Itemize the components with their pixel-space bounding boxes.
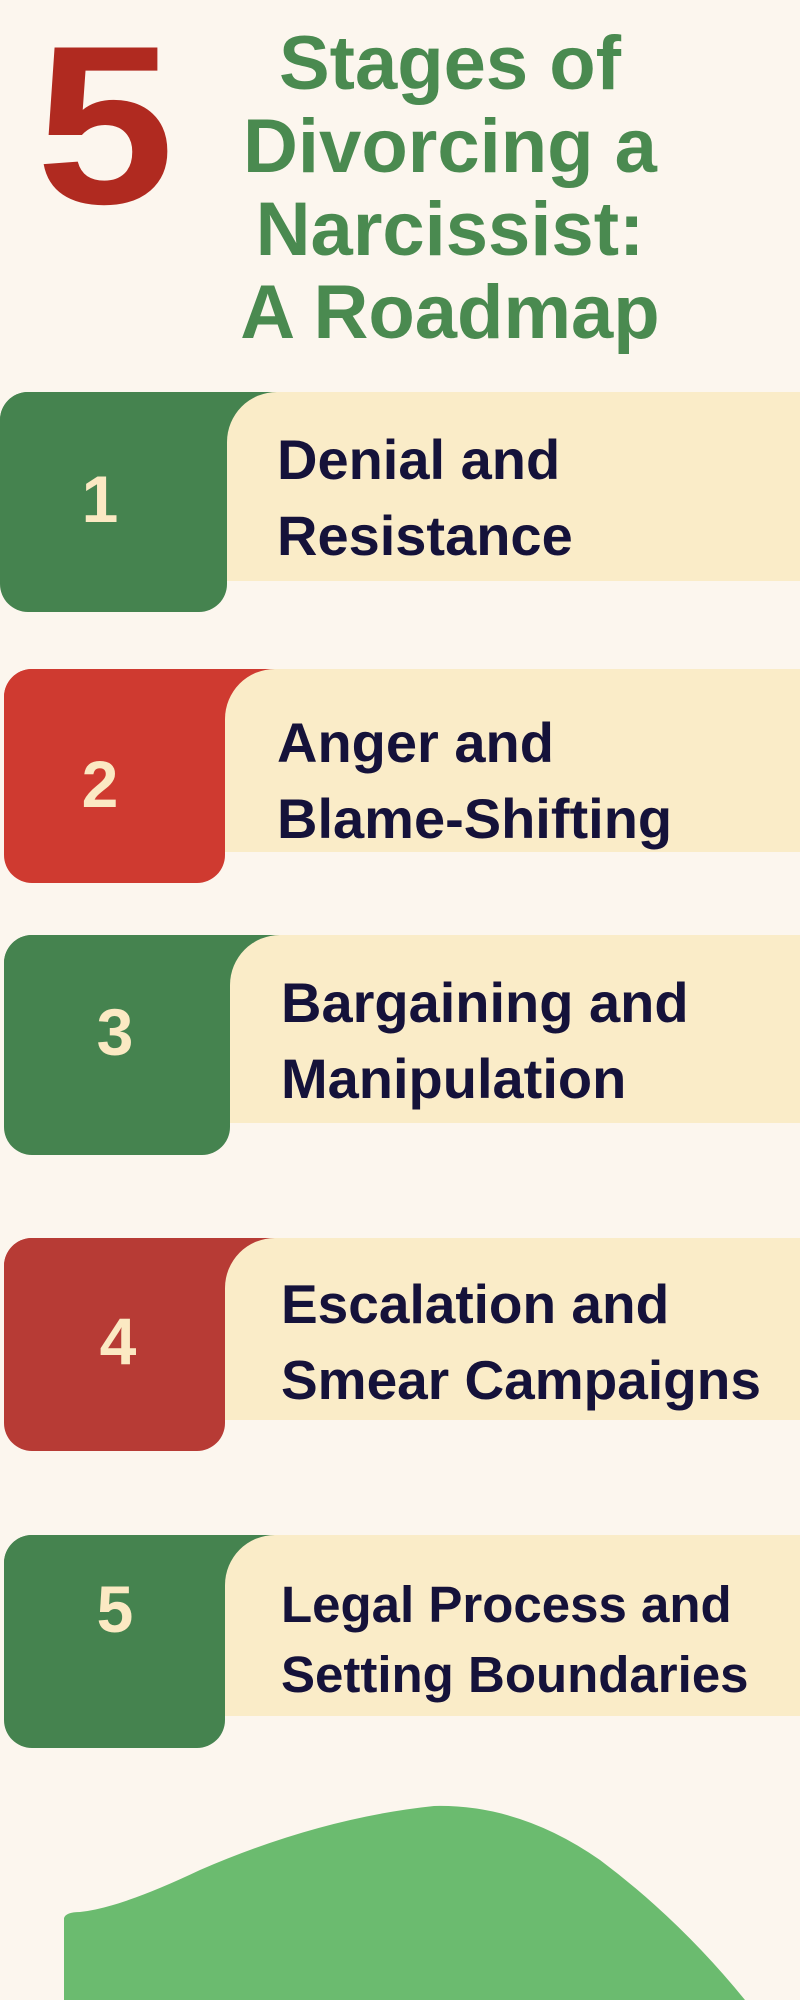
text stage 5 <box>281 1576 749 1703</box>
number 5: 5 <box>97 1572 133 1646</box>
text stage 2: Anger and <box>277 711 554 774</box>
text stage 3: Manipulation <box>281 1047 626 1110</box>
text stage 3 <box>281 971 689 1110</box>
text stage 5: Legal Process and <box>281 1576 732 1633</box>
text stage 4: Escalation and <box>281 1273 669 1335</box>
stage 3 <box>4 935 800 1155</box>
number 3: 3 <box>97 995 133 1069</box>
title <box>240 21 660 355</box>
title: Narcissist: <box>256 187 644 272</box>
title: Stages of <box>279 21 621 106</box>
stage 2 <box>4 669 800 883</box>
number 1: 1 <box>82 462 118 536</box>
number 2: 2 <box>82 747 118 821</box>
text stage 1: Denial and <box>277 428 560 491</box>
title number: 5 <box>36 0 174 251</box>
stage 4 <box>4 1238 800 1451</box>
text stage 4: Smear Campaigns <box>281 1349 761 1411</box>
decorative green hill <box>64 1806 745 2000</box>
text stage 2 <box>277 711 672 850</box>
text stage 5: Setting Boundaries <box>281 1646 749 1703</box>
number 4: 4 <box>100 1304 136 1378</box>
title: A Roadmap <box>240 270 660 355</box>
text stage 2: Blame-Shifting <box>277 787 672 850</box>
title: Divorcing a <box>243 104 657 189</box>
stage 5 <box>4 1535 800 1748</box>
text stage 4 <box>281 1273 761 1411</box>
text stage 3: Bargaining and <box>281 971 689 1034</box>
stage 1 <box>0 392 800 612</box>
text stage 1 <box>277 428 573 567</box>
text stage 1: Resistance <box>277 504 573 567</box>
